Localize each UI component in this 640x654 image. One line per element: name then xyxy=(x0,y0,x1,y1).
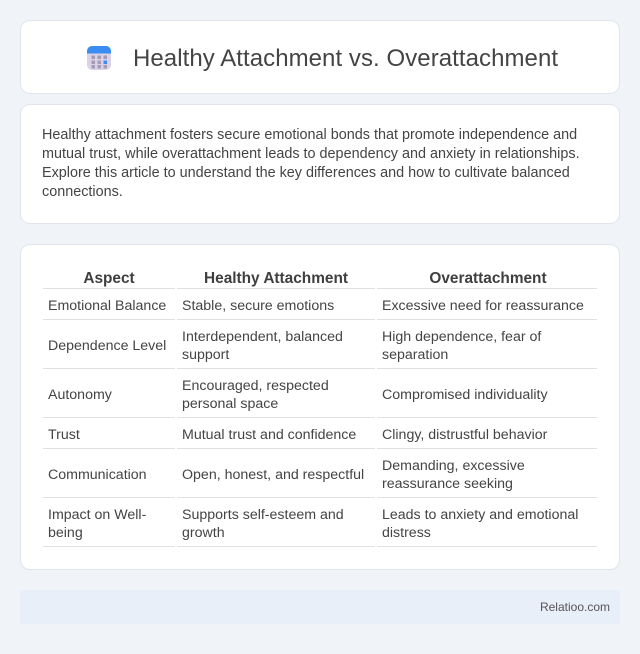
row: Autonomy: Autonomy xyxy=(48,387,112,403)
table header: Overattachment xyxy=(429,270,547,287)
row: Autonomy: personal space xyxy=(182,396,278,412)
row: Trust: Mutual trust and confidence xyxy=(182,427,356,443)
row: Impact on Well-being: being xyxy=(48,525,83,541)
table header xyxy=(83,270,547,287)
row: Dependence Level: High dependence, fear of xyxy=(382,329,541,345)
comparison table card xyxy=(20,244,620,570)
row: Dependence Level: Dependence Level xyxy=(48,338,166,354)
intro text xyxy=(42,127,580,200)
row: Impact on Well-being: growth xyxy=(182,525,225,541)
intro card xyxy=(20,104,620,224)
row: Emotional Balance: Stable, secure emotions xyxy=(182,298,334,314)
row: Emotional Balance xyxy=(48,298,584,314)
row: Autonomy xyxy=(48,378,548,412)
row: Impact on Well-being: distress xyxy=(382,525,431,541)
row: Communication: Demanding, excessive xyxy=(382,458,525,474)
icon: calendar xyxy=(87,46,111,70)
table header: Aspect xyxy=(83,270,135,287)
intro text: connections. xyxy=(42,184,123,200)
row: Communication xyxy=(48,458,525,492)
row: Communication: reassurance seeking xyxy=(382,476,513,492)
row: Dependence Level: separation xyxy=(382,347,448,363)
row: Trust: Clingy, distrustful behavior xyxy=(382,427,547,443)
row: Impact on Well-being: Impact on Well- xyxy=(48,507,146,523)
row: Trust xyxy=(48,427,548,443)
row: Impact on Well-being: Supports self-esteem and xyxy=(182,507,344,523)
row: Communication: Communication xyxy=(48,467,147,483)
row: Dependence Level: support xyxy=(182,347,229,363)
row: Communication: Open, honest, and respectful xyxy=(182,467,364,483)
intro text: mutual trust, while overattachment leads to dependency and anxiety in relationships. xyxy=(42,146,580,162)
row: Dependence Level xyxy=(48,329,542,363)
title card xyxy=(20,20,620,94)
footer bar xyxy=(20,590,620,624)
row: Emotional Balance: Excessive need for reassurance xyxy=(382,298,584,314)
row: Impact on Well-being xyxy=(48,507,578,541)
row: Autonomy: Compromised individuality xyxy=(382,387,548,403)
row: Dependence Level: Interdependent, balanced xyxy=(182,329,343,345)
intro text: Explore this article to understand the key differences and how to cultivate balanced xyxy=(42,165,570,181)
footer brand: Relatioo.com xyxy=(540,600,610,614)
intro text: Healthy attachment fosters secure emotional bonds that promote independence and xyxy=(42,127,577,143)
row: Trust: Trust xyxy=(48,427,80,443)
table header: Healthy Attachment xyxy=(204,270,348,287)
row: Impact on Well-being: Leads to anxiety and emotional xyxy=(382,507,578,523)
row: Emotional Balance: Emotional Balance xyxy=(48,298,166,314)
title: Healthy Attachment vs. Overattachment xyxy=(133,45,558,72)
row: Autonomy: Encouraged, respected xyxy=(182,378,329,394)
